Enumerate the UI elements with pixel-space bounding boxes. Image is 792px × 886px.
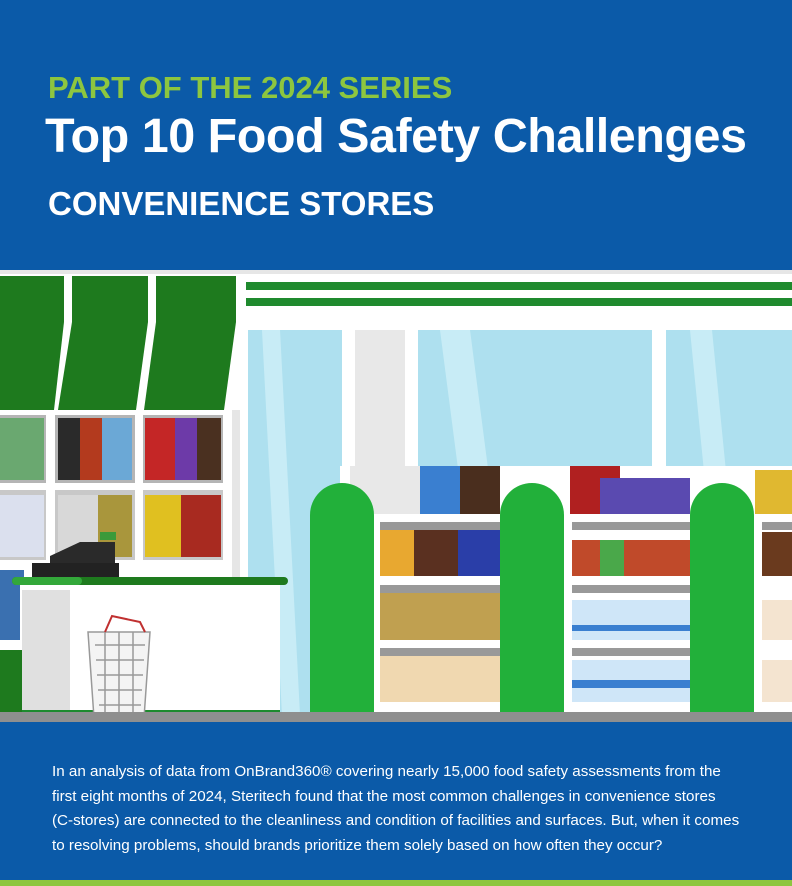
bottom bar (0, 880, 792, 886)
intro paragraph: In an analysis of data from OnBrand360® covering nearly 15,000 food safety assessments from the (52, 763, 721, 780)
store illustration (0, 270, 792, 722)
green pillars (310, 483, 754, 720)
floor (0, 712, 792, 722)
intro paragraph (52, 763, 739, 854)
title: Top 10 Food Safety Challenges (45, 109, 746, 163)
shelving units (340, 466, 792, 716)
counter (0, 577, 288, 718)
intro paragraph: to resolving problems, should brands prioritize them solely based on how often they occur? (52, 836, 662, 854)
storefront wall (0, 270, 792, 722)
awnings (0, 274, 240, 410)
intro paragraph: (C-stores) are connected to the cleanliness and condition of facilities and surfaces. But, when it comes (52, 812, 739, 829)
basket (88, 616, 150, 718)
cash register (32, 532, 119, 577)
kicker: series: PART OF THE 2024 SERIES (48, 70, 452, 105)
header (0, 0, 792, 270)
left shelves (0, 410, 232, 715)
subtitle: CONVENIENCE STORES (48, 185, 434, 222)
intro paragraph: first eight months of 2024, Steritech found that the most common challenges in convenience stores (52, 788, 716, 804)
windows (240, 320, 792, 715)
